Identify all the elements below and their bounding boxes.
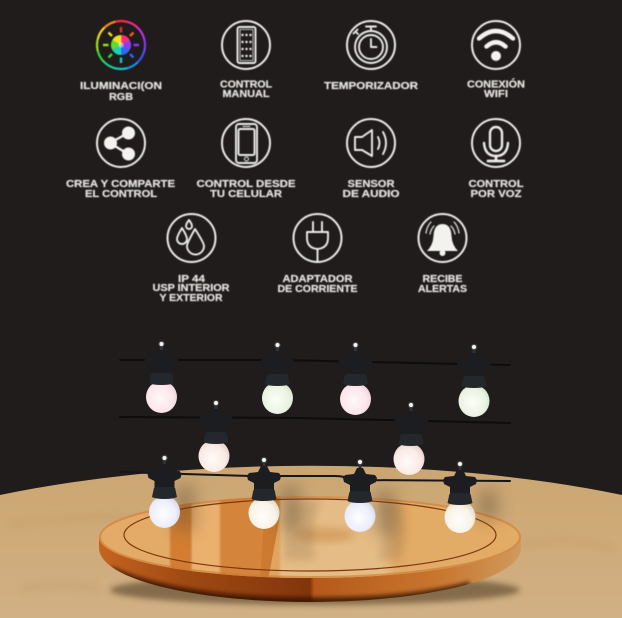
icon: remote bbox=[222, 21, 270, 69]
lamp shadows on table bbox=[175, 485, 498, 535]
feature: phone control bbox=[196, 119, 296, 200]
feature: timer bbox=[324, 21, 418, 92]
label bbox=[220, 78, 273, 100]
icon: RGB wheel bbox=[87, 11, 155, 79]
label: TU CELULAR bbox=[210, 188, 282, 200]
feature: voice control bbox=[468, 119, 524, 200]
label: RGB bbox=[109, 91, 133, 103]
label: MANUAL bbox=[222, 88, 270, 100]
label: USP INTERIOR bbox=[152, 282, 230, 294]
label bbox=[278, 273, 358, 295]
icon: speaker bbox=[347, 119, 395, 167]
feature: audio sensor bbox=[342, 119, 400, 200]
label: ALERTAS bbox=[418, 283, 467, 295]
lamp 5 bbox=[198, 400, 233, 472]
label bbox=[418, 273, 467, 295]
label bbox=[66, 178, 175, 200]
label: IP 44 bbox=[178, 273, 205, 285]
label bbox=[342, 178, 400, 200]
light string: middle row bbox=[198, 400, 428, 475]
label: WIFI bbox=[484, 88, 508, 100]
label: POR VOZ bbox=[470, 188, 522, 200]
lamp 4 bbox=[457, 344, 491, 417]
label: EL CONTROL bbox=[85, 188, 158, 200]
icon: water drops bbox=[168, 214, 216, 262]
label: SENSOR bbox=[348, 178, 395, 190]
lamp 2 bbox=[260, 342, 294, 414]
lamp 7 bbox=[148, 455, 182, 528]
label: CONEXIÓN bbox=[467, 78, 525, 90]
label: TEMPORIZADOR bbox=[324, 80, 418, 92]
label: RECIBE bbox=[422, 273, 462, 285]
label bbox=[467, 78, 525, 100]
lamp 10 bbox=[443, 461, 477, 533]
label bbox=[468, 178, 524, 200]
lamp 8 bbox=[247, 457, 281, 529]
label: Y EXTERIOR bbox=[160, 292, 223, 304]
lamp 3 bbox=[338, 342, 372, 415]
icon: share bbox=[97, 119, 145, 167]
lamp 1 bbox=[144, 341, 178, 413]
icon: microphone bbox=[472, 119, 520, 167]
label: ADAPTADOR bbox=[282, 273, 353, 285]
string wires bbox=[120, 360, 510, 481]
feature: manual control bbox=[220, 21, 273, 100]
label: CREA Y COMPARTE bbox=[66, 178, 175, 190]
label: CONTROL DESDE bbox=[196, 178, 296, 190]
label bbox=[80, 80, 162, 103]
light string: bottom row bbox=[148, 455, 477, 533]
wooden table bbox=[0, 466, 622, 618]
feature: power adapter bbox=[278, 214, 358, 295]
lamp 9 bbox=[343, 459, 377, 532]
label: CONTROL bbox=[220, 78, 273, 90]
label: DE CORRIENTE bbox=[278, 283, 358, 295]
label: CONTROL bbox=[468, 178, 524, 190]
feature: alerts bbox=[418, 214, 467, 295]
feature: share bbox=[66, 119, 175, 200]
icon: wifi bbox=[472, 21, 520, 69]
wooden board bbox=[90, 490, 530, 605]
label bbox=[196, 178, 296, 200]
icon: stopwatch bbox=[347, 21, 395, 69]
feature: IP44 bbox=[152, 214, 230, 304]
label: DE AUDIO bbox=[342, 188, 400, 200]
feature: wifi bbox=[467, 21, 525, 100]
label bbox=[152, 273, 230, 304]
feature: RGB lighting bbox=[80, 11, 162, 103]
icon: bell bbox=[418, 214, 466, 262]
icon: plug bbox=[294, 214, 342, 262]
light string: top row bbox=[144, 341, 491, 417]
icon: phone bbox=[222, 119, 270, 167]
lamp 6 bbox=[394, 402, 428, 475]
label: ILUMINACI(ON bbox=[80, 80, 162, 92]
